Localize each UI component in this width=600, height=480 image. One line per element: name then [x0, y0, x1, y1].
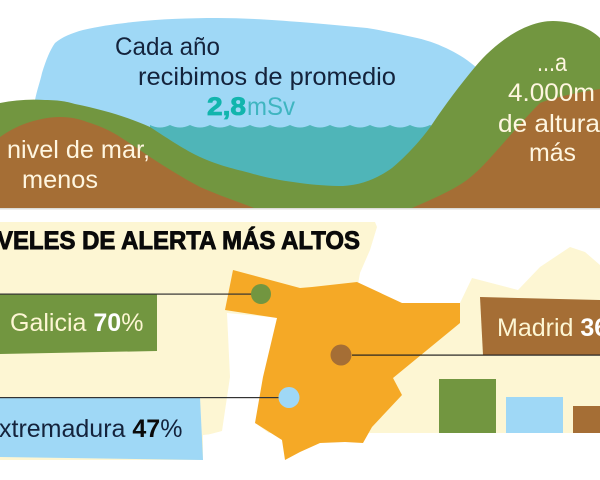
text: at altitude [498, 49, 600, 167]
card background [480, 297, 600, 355]
water [150, 125, 440, 200]
card background [0, 397, 203, 460]
line: menos: menos [22, 166, 98, 194]
map dot: Madrid [330, 344, 352, 366]
card: Madrid [480, 297, 600, 355]
brown soil right [412, 89, 600, 208]
panel: alert levels background [0, 222, 600, 460]
card label: xtremadura 47% [0, 415, 182, 443]
brown soil left [0, 117, 254, 208]
map of Spain [225, 270, 460, 460]
leader line: Madrid [352, 354, 600, 356]
line: más: más [529, 139, 576, 167]
line: nivel de mar: nivel de mar, [7, 136, 150, 164]
heading: VELES DE ALERTA MÁS ALTOS [0, 226, 360, 255]
line: de altura: de altura [498, 110, 600, 138]
card background [0, 294, 157, 354]
white coastal patch [203, 313, 285, 480]
panel: altitude landscape [0, 18, 600, 210]
line: cada año: Cada año [115, 33, 220, 61]
card: Galicia [0, 294, 157, 354]
bar: Extremadura [506, 397, 563, 433]
bar: Galicia [439, 379, 496, 433]
value number: 2,8 [207, 93, 246, 121]
line: recibimos de promedio: recibimos de promedio [138, 63, 396, 91]
map dot: Galicia [251, 284, 271, 304]
sky [35, 18, 478, 200]
line: a: ...a [537, 49, 567, 77]
ground line [0, 208, 600, 210]
card label: Galicia 70% [10, 309, 143, 337]
text: sea level [7, 136, 150, 194]
text: yearly average [115, 33, 396, 91]
value unit: mSv [247, 93, 295, 121]
value: 2,8 mSv [207, 93, 295, 121]
leader line: Galicia [0, 294, 252, 295]
leader line: Extremadura [0, 397, 280, 398]
line: 4.000m: 4.000m [508, 79, 595, 107]
bar chart [439, 379, 600, 433]
green hills [0, 21, 600, 208]
bar: Madrid [573, 406, 600, 433]
card: Extremadura [0, 397, 203, 460]
map dot: Extremadura [278, 387, 300, 408]
